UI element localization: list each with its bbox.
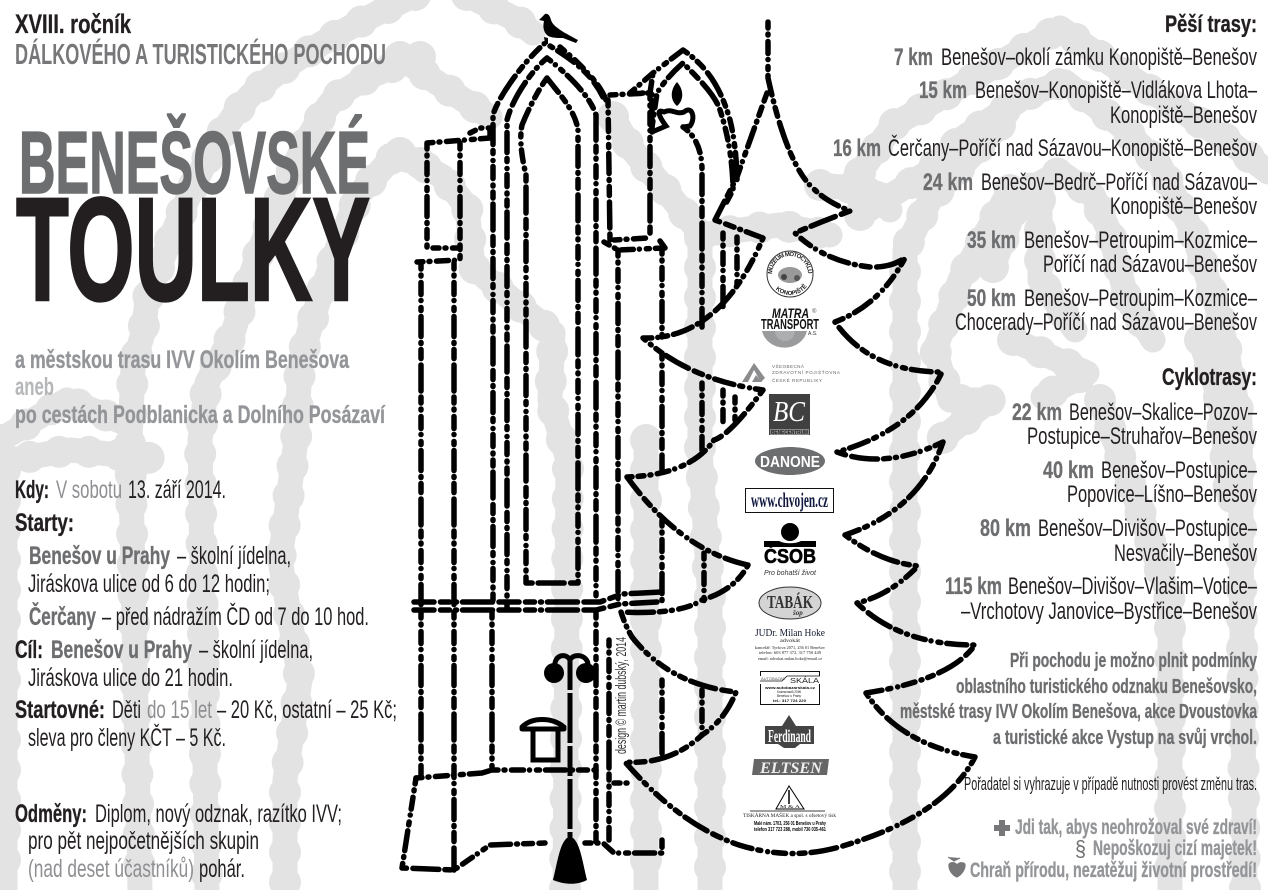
logo: Benecentrum bbox=[769, 394, 810, 436]
icon: door bell shape bbox=[553, 836, 587, 884]
event information bbox=[15, 476, 397, 883]
starts bbox=[15, 509, 369, 631]
logo: Muzeum motocyklů Konopiště: KONOPIŠTĚ bbox=[776, 284, 807, 296]
route 24 km: 24 km bbox=[923, 169, 973, 196]
logo: Ferdinand: Ferdinand bbox=[768, 726, 811, 746]
route 15 km bbox=[919, 77, 1257, 129]
starts: – školní jídelna, bbox=[177, 542, 291, 570]
route 16 km: 16 km bbox=[833, 135, 881, 162]
walking routes bbox=[833, 11, 1257, 336]
route 80 km bbox=[980, 515, 1257, 567]
logo: JUDr. Milan Hoke: telefon: 603 877 372, 317 750 449 bbox=[759, 650, 821, 656]
rewards: pro pět nejpočetnějších skupin bbox=[28, 827, 259, 855]
logo: Benecentrum: BENECENTRUM bbox=[771, 430, 808, 436]
logo: Ferdinand bbox=[765, 715, 814, 748]
route 80 km: 80 km bbox=[980, 515, 1031, 542]
tree branch hatching bbox=[702, 383, 735, 735]
route 35 km: 35 km bbox=[967, 227, 1016, 254]
double band across the tower bbox=[414, 592, 662, 610]
logo: Tabák: šop bbox=[792, 609, 803, 617]
logo: JUDr. Milan Hoke bbox=[755, 627, 826, 661]
logo: Matra Transport: MATRA bbox=[772, 305, 809, 321]
designer credit: design © martin dubský, 2014 bbox=[613, 637, 630, 754]
sponsor logos bbox=[742, 250, 841, 833]
entry fee bbox=[15, 696, 397, 752]
left tower bbox=[417, 128, 490, 610]
when: Kdy: bbox=[15, 476, 49, 504]
icon: paragraph sign: § bbox=[1075, 836, 1086, 861]
logo: Všeobecná zdravotní pojišťovna: ČESKÉ REPUBLIKY bbox=[772, 377, 822, 383]
route 22 km bbox=[1012, 399, 1257, 450]
starts: Benešov u Prahy bbox=[29, 542, 170, 570]
logo: ČSOB: Pro bohatší život bbox=[764, 570, 817, 577]
finish bbox=[15, 636, 313, 692]
logo: Tabák: TABÁK bbox=[767, 591, 813, 612]
route 22 km: 22 km bbox=[1012, 399, 1062, 426]
central buttress bbox=[604, 93, 665, 603]
logo: Autobazar Skála: tel.: 317 724 220 bbox=[773, 698, 807, 703]
logo: Autobazar Skála: AUTOBAZAR bbox=[761, 676, 785, 681]
logo: ČSOB: ČSOB bbox=[764, 544, 816, 568]
logo: Matra Transport: TRANSPORT bbox=[761, 316, 819, 333]
logo: Všeobecná zdravotní pojišťovna: ZDRAVOTNÍ POJIŠŤOVNA bbox=[772, 368, 841, 375]
starts: – před nádražím ČD od 7 do 10 hod. bbox=[102, 602, 369, 631]
lower walls bbox=[402, 612, 662, 870]
icon: wall niche box bbox=[522, 720, 564, 760]
illustration: church drawn in dotted lines bbox=[402, 14, 737, 884]
entry fee: sleva pro členy KČT – 5 Kč. bbox=[28, 723, 226, 752]
subtitle: DÁLKOVÉHO A TURISTICKÉHO POCHODU bbox=[15, 37, 386, 71]
tagline: po cestách Podblanicka a Dolního Posázaví bbox=[15, 401, 386, 429]
illustration: fir tree outline bbox=[621, 22, 975, 854]
logo: Tabák bbox=[759, 587, 821, 619]
main title: Benešovské: BENEŠOVSKÉ bbox=[19, 113, 370, 212]
right gothic window bbox=[630, 50, 737, 327]
route 24 km bbox=[923, 169, 1257, 220]
icon: street lamp bbox=[544, 656, 596, 837]
when bbox=[15, 476, 226, 504]
finish: – školní jídelna, bbox=[199, 636, 313, 664]
icon: bird bbox=[539, 14, 578, 44]
cycling routes bbox=[945, 364, 1257, 625]
hiking rules bbox=[948, 816, 1257, 882]
logo: Danone: DANONE bbox=[760, 454, 820, 471]
logo: Matra Transport: A.S. bbox=[808, 331, 817, 337]
route 115 km bbox=[945, 573, 1257, 625]
logo: Tiskárna Mašek bbox=[743, 786, 837, 833]
rewards: pohár. bbox=[199, 855, 245, 883]
logo: www.chvojen.cz: www.chvojen.cz bbox=[751, 488, 828, 512]
when: 13. září 2014. bbox=[128, 476, 226, 504]
route 15 km: 15 km bbox=[919, 77, 967, 104]
logo: Autobazar Skála bbox=[760, 672, 820, 704]
entry fee: do 15 let bbox=[147, 696, 212, 724]
tagline: a městskou trasu IVV Okolím Benešova bbox=[15, 346, 350, 374]
logo: Autobazar Skála: Benešov u Prahy bbox=[777, 694, 801, 698]
logo: Autobazar Skála: SKÁLA bbox=[790, 676, 819, 685]
route 35 km bbox=[967, 227, 1257, 278]
route 40 km: 40 km bbox=[1043, 457, 1094, 484]
route 7 km: 7 km bbox=[894, 44, 933, 71]
logo: Autobazar Skála: Kosmonautů 2096 bbox=[777, 690, 801, 694]
logo: Benecentrum: BC bbox=[773, 397, 805, 428]
icon: cross bbox=[994, 820, 1010, 836]
rewards: (nad deset účastníků) bbox=[28, 855, 194, 883]
route 50 km bbox=[955, 285, 1257, 336]
logo: Tiskárna Mašek: Malé nám. 1703, 256 01 Benešov u Prahy bbox=[754, 821, 827, 827]
tagline bbox=[15, 346, 386, 429]
when: V sobotu bbox=[56, 476, 122, 504]
main gothic arch bbox=[493, 43, 606, 608]
logo: Matra Transport: ® bbox=[812, 308, 817, 315]
rewards: Diplom, nový odznak, razítko IVV; bbox=[95, 800, 342, 828]
logo: Muzeum motocyklů Konopiště: MUZEUM MOTOCYKLŮ bbox=[768, 252, 814, 274]
logo: www.chvojen.cz bbox=[746, 488, 834, 512]
finish: Benešov u Prahy bbox=[51, 636, 192, 664]
icon: apple heart bbox=[948, 857, 965, 877]
rewards bbox=[15, 800, 342, 883]
note: badge conditions bbox=[900, 649, 1257, 749]
logo: JUDr. Milan Hoke: email: advokat.milan.hoke@email.cz bbox=[758, 656, 822, 661]
rewards: Odměny: bbox=[15, 800, 87, 828]
starts: Čerčany bbox=[29, 601, 96, 631]
finish: Jiráskova ulice do 21 hodin. bbox=[28, 664, 233, 692]
title block bbox=[15, 9, 386, 429]
entry fee: Startovné: bbox=[15, 696, 105, 724]
logo: ČSOB bbox=[764, 523, 817, 577]
tree contour bbox=[621, 22, 975, 854]
logo: Autobazar Skála: www.autobazarskala.cz bbox=[764, 685, 815, 690]
logo: Všeobecná zdravotní pojišťovna: VŠEOBECNÁ bbox=[772, 363, 805, 369]
logo: Tiskárna Mašek: TISKÁRNA MAŠEK a spol. s ofsetový tisk bbox=[743, 813, 837, 819]
route 40 km bbox=[1043, 457, 1257, 508]
logo: Všeobecná zdravotní pojišťovna bbox=[742, 363, 841, 383]
entry fee: – 20 Kč, ostatní – 25 Kč; bbox=[217, 696, 397, 724]
logo: JUDr. Milan Hoke: kancelář: Tyršova 2071, 256 01 Benešov bbox=[755, 645, 826, 651]
logo: Eltsen: ELTSEN bbox=[759, 760, 823, 777]
route 115 km: 115 km bbox=[945, 573, 1002, 600]
starts: Jiráskova ulice od 6 do 12 hodin; bbox=[28, 570, 270, 598]
finish: Cíl: bbox=[15, 636, 43, 664]
logo: Tiskárna Mašek: M & A bbox=[780, 804, 801, 809]
entry fee: Děti bbox=[112, 696, 141, 724]
logo: Matra Transport bbox=[761, 305, 819, 348]
route 50 km: 50 km bbox=[967, 285, 1016, 312]
tagline: aneb bbox=[15, 373, 54, 401]
window tracery bbox=[652, 82, 693, 132]
edition line: XVIII. ročník bbox=[15, 9, 131, 39]
logo: JUDr. Milan Hoke: advokát bbox=[780, 638, 801, 644]
logo: Tiskárna Mašek: telefon 317 723 288, mobil 736 035-461 bbox=[754, 827, 826, 833]
logo: Muzeum motocyklů Konopiště bbox=[766, 250, 814, 298]
main title: Toulky: TOULKY bbox=[16, 168, 370, 332]
starts: Starty: bbox=[15, 509, 74, 537]
logo: Danone bbox=[755, 447, 825, 475]
logo: JUDr. Milan Hoke: JUDr. Milan Hoke bbox=[755, 627, 825, 639]
